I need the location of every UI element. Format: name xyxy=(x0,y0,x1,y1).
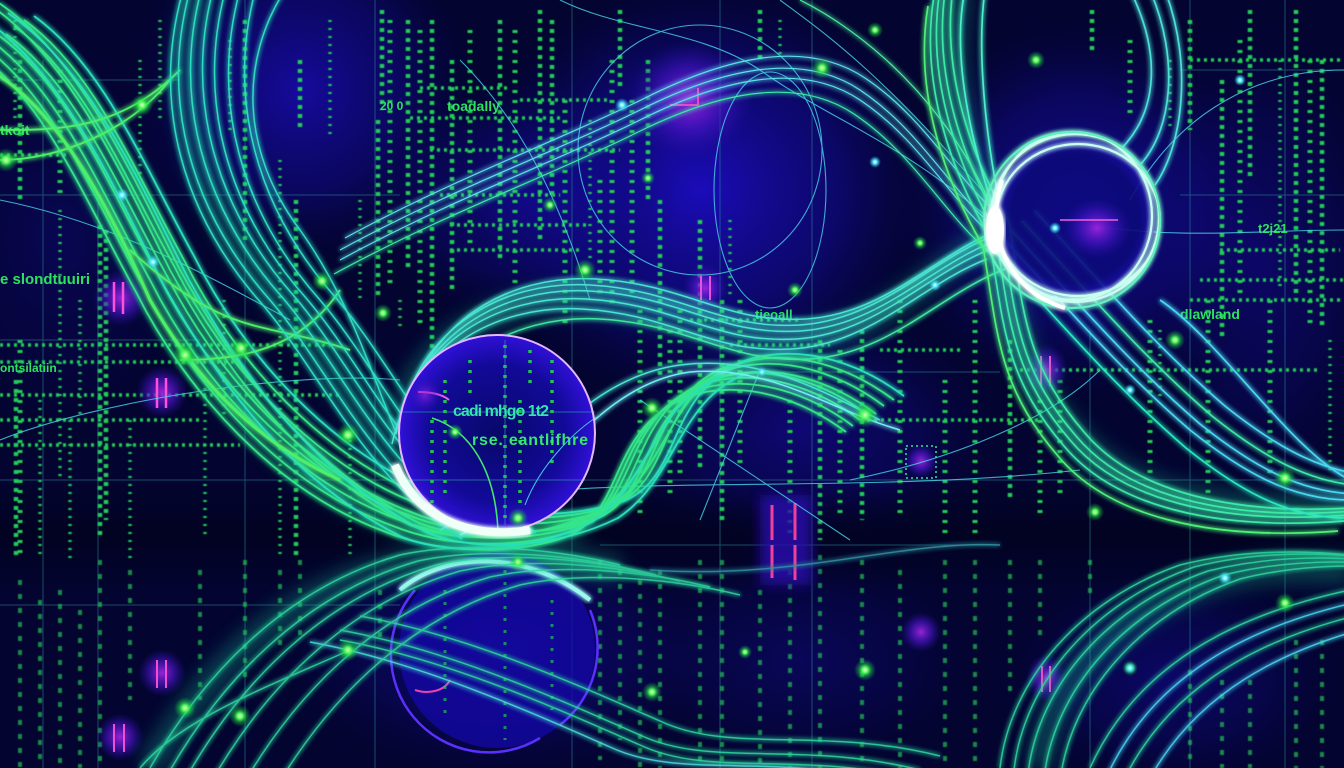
small text fragments in the data field: ontsilatiin xyxy=(0,361,57,375)
fiber bundle: middle wave xyxy=(392,229,1005,535)
lens readout text: rse. eantlifhre xyxy=(472,432,588,449)
purple data blocks xyxy=(93,42,1068,761)
fiber bundle: left green sweep xyxy=(0,3,904,550)
small text fragments in the data field: 20 0 xyxy=(380,99,404,113)
lens inner green arc xyxy=(432,418,498,530)
block: centre xyxy=(683,264,727,312)
lens readout text: cadi mhgo 1t2 xyxy=(453,403,549,420)
lens rim xyxy=(399,335,595,531)
block: centre tall bars xyxy=(760,495,812,585)
block: left middle xyxy=(136,366,188,418)
glowing cyan nodes xyxy=(115,74,1246,674)
small text fragments in the data field: tieoall xyxy=(755,307,793,322)
ring interior xyxy=(995,138,1155,298)
thin cyan arcs xyxy=(0,0,1344,540)
lens circle with readout xyxy=(395,335,600,532)
lens disc xyxy=(399,335,595,531)
block: reflected right xyxy=(1026,654,1066,702)
small text fragments in the data field xyxy=(0,98,1288,375)
lens grid xyxy=(400,340,595,525)
fiber bundle: upper-left arcs xyxy=(171,0,536,539)
fiber bundle: lower reflection xyxy=(140,545,1344,768)
small text fragments in the data field: e slondtuuiri xyxy=(0,271,90,288)
white glow arc xyxy=(395,465,530,532)
block: reflected square xyxy=(901,612,941,652)
block: right xyxy=(1024,344,1068,396)
small text fragments in the data field: dlawland xyxy=(1180,306,1240,322)
block: dotted square xyxy=(904,444,938,478)
small text fragments in the data field: toadally xyxy=(447,98,500,114)
block: left upper xyxy=(93,270,149,326)
block: reflected lower left xyxy=(96,713,144,761)
fiber bundle: right sweep xyxy=(924,0,1344,533)
glowing ring: right xyxy=(984,132,1160,308)
reflected lens circle xyxy=(391,552,598,752)
block: reflected left xyxy=(138,649,186,697)
block: top purple glow xyxy=(628,42,752,158)
small text fragments in the data field: t2j21 xyxy=(1258,221,1288,236)
small text fragments in the data field: tkoit xyxy=(0,122,30,138)
lens readout text xyxy=(453,403,588,449)
lens magenta tick xyxy=(418,392,449,400)
fiber bundle: top wave xyxy=(334,0,1000,274)
ring purple core xyxy=(1063,198,1131,258)
